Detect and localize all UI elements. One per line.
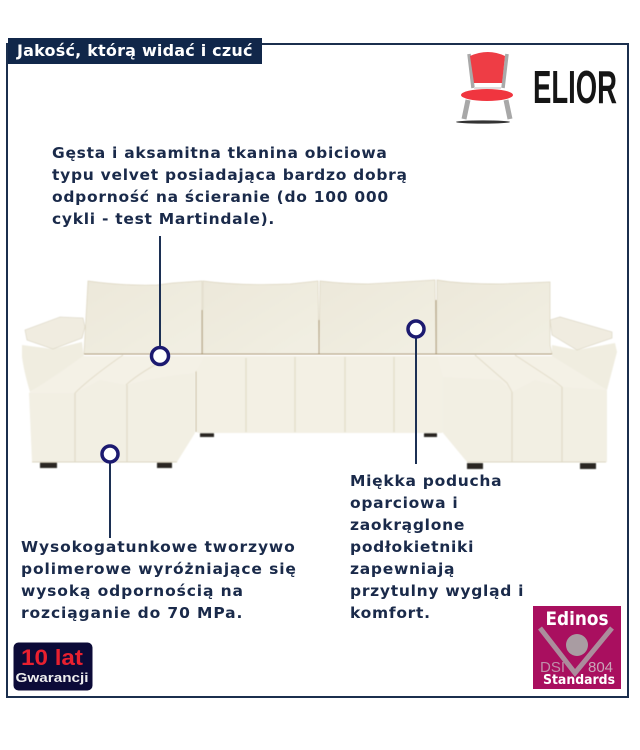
text: cushion description: podłokietniki bbox=[350, 538, 474, 556]
centre seat bbox=[196, 356, 444, 433]
badge: 10 years warranty bbox=[14, 642, 92, 690]
armrest right bbox=[550, 317, 617, 390]
text: cushion description: zaokrąglone bbox=[350, 516, 465, 534]
text: polymer description: wysoką odpornością na bbox=[21, 582, 244, 600]
text: cushion description: zapewniają bbox=[350, 560, 455, 578]
text: polymer description: polimerowe wyróżniające się bbox=[21, 560, 297, 578]
cushion seams bbox=[84, 300, 552, 354]
icon: red chair bbox=[456, 52, 513, 124]
text: cushion description: przytulny wygląd i bbox=[350, 582, 524, 600]
badge: Edinos standards: DSI bbox=[540, 659, 565, 676]
callout line and marker: fabric bbox=[152, 236, 168, 364]
text: fabric description: Gęsta i aksamitna tkanina obiciowa bbox=[52, 144, 388, 162]
badge: Edinos standards: Standards bbox=[543, 673, 615, 688]
title: Jakość, którą widać i czuć bbox=[17, 41, 253, 60]
title bbox=[8, 38, 262, 64]
text: fabric description bbox=[52, 144, 408, 228]
badge: Edinos standards: Edinos bbox=[546, 608, 608, 630]
badge: Edinos standards: 804 bbox=[588, 659, 613, 676]
callout line and marker: cushion bbox=[408, 321, 424, 464]
left chaise bbox=[29, 355, 205, 462]
text: cushion description: komfort. bbox=[350, 604, 431, 622]
badge: 10 years warranty: 10 lat bbox=[21, 645, 84, 670]
text: fabric description: odporność na ścieranie (do 100 000 bbox=[52, 188, 389, 206]
text: fabric description: cykli - test Martindale). bbox=[52, 210, 275, 228]
text: cushion description: Miękka poducha bbox=[350, 472, 502, 490]
text: cushion description: oparciowa i bbox=[350, 494, 458, 512]
right chaise bbox=[437, 355, 607, 462]
sofa feet bbox=[40, 432, 596, 469]
text: polymer description: Wysokogatunkowe tworzywo bbox=[21, 538, 296, 556]
back cushions bbox=[84, 280, 552, 354]
callout line and marker: polymer bbox=[102, 446, 118, 538]
text: polymer description bbox=[21, 538, 297, 622]
text: fabric description: typu velvet posiadająca bardzo dobrą bbox=[52, 166, 408, 184]
badge: 10 years warranty: Gwarancji bbox=[16, 670, 88, 685]
armrest left bbox=[22, 317, 85, 392]
badge: Edinos standards bbox=[533, 606, 621, 689]
text: cushion description bbox=[350, 472, 524, 622]
logo: Elior bbox=[456, 52, 617, 124]
text: polymer description: rozciąganie do 70 MPa. bbox=[21, 604, 243, 622]
